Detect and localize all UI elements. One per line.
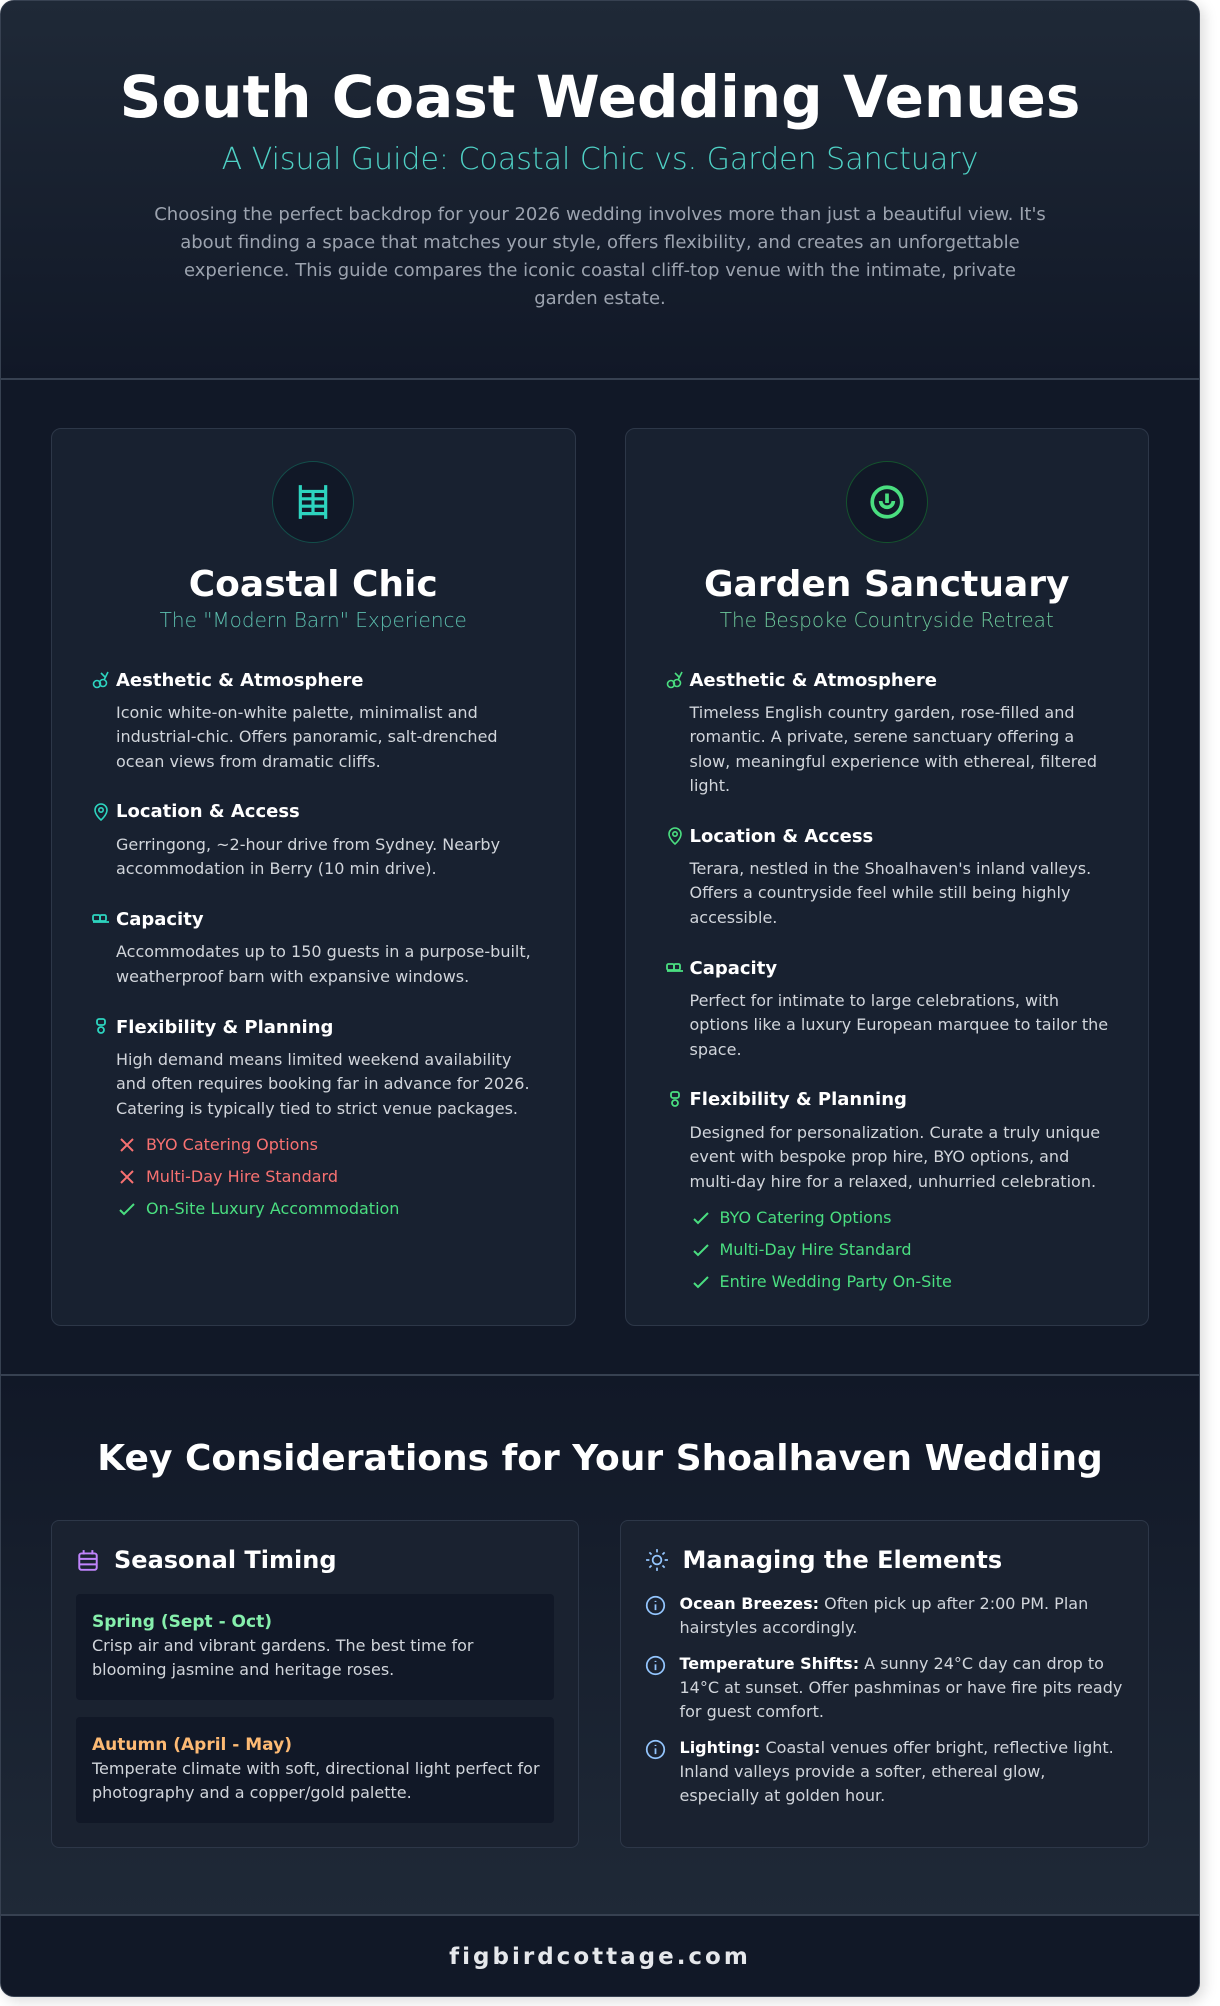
autumn box: Temperate climate with soft, directional light perfect for photography and a copper/gold palette. — [92, 1759, 540, 1802]
item: aesthetic: Aesthetic & Atmosphere — [690, 670, 937, 690]
item: temperature: Temperature Shifts: A sunny 24°C day can drop to 14°C at sunset. Offer pashminas or have fire pits ready for guest comfort. — [680, 1654, 1122, 1721]
spring box: Spring (Sept - Oct) — [92, 1612, 272, 1632]
item: location: Terara, nestled in the Shoalhaven's inland valleys. Offers a countryside feel while still being highly accessible. — [690, 859, 1091, 927]
item: capacity: Capacity — [690, 958, 777, 979]
card subtitle: The "Modern Barn" Experience — [160, 608, 467, 632]
subtitle: A Visual Guide: Coastal Chic vs. Garden Sanctuary — [222, 142, 978, 177]
item: flexibility: High demand means limited weekend availability and often requires booking far in advance for 2026. Catering is typically tied to strict venue packages. — [116, 1050, 530, 1118]
item: capacity: Capacity — [116, 909, 204, 930]
item: ocean breezes: Ocean Breezes: Often pick up after 2:00 PM. Plan hairstyles accordingly. — [680, 1594, 1088, 1637]
item: aesthetic: Aesthetic & Atmosphere — [116, 670, 364, 690]
intro text: Choosing the perfect backdrop for your 2026 wedding involves more than just a beautiful view. It's about finding a space that matches your style, offers flexibility, and creates an unforgettable experience. This guide compares the iconic coastal cliff-top venue with the intimate, private garden estate. — [154, 204, 1046, 309]
checklist — [693, 1208, 952, 1291]
venues section — [1, 380, 1199, 1376]
card title: Coastal Chic — [189, 564, 438, 605]
footer: figbirdcottage.com — [449, 1944, 751, 1970]
item: capacity — [92, 909, 531, 986]
heading: managing: Managing the Elements — [682, 1546, 1002, 1574]
item: capacity — [666, 958, 1108, 1059]
item: lighting: Lighting: Coastal venues offer bright, reflective light. Inland valleys provide a softer, ethereal glow, especially at golden hour. — [680, 1738, 1114, 1805]
checklist: BYO Catering Options — [720, 1208, 891, 1227]
spring box — [76, 1594, 554, 1700]
item: location: Location & Access — [690, 826, 873, 847]
spring box: Crisp air and vibrant gardens. The best time for blooming jasmine and heritage roses. — [92, 1636, 474, 1679]
title: South Coast Wedding Venues — [120, 63, 1080, 131]
autumn box — [76, 1717, 554, 1823]
item: aesthetic: Iconic white-on-white palette, minimalist and industrial-chic. Offers panoramic, salt-drenched ocean views from dramatic cliffs. — [116, 703, 498, 771]
checklist: Multi-Day Hire Standard — [720, 1240, 911, 1259]
checklist: Entire Wedding Party On-Site — [720, 1272, 952, 1291]
panel: coastal chic — [51, 428, 576, 1326]
card title: Garden Sanctuary — [704, 564, 1069, 605]
key considerations section — [1, 1376, 1199, 1916]
item: aesthetic — [666, 670, 1097, 795]
icon: barn — [272, 461, 354, 543]
item: location: Location & Access — [116, 801, 300, 822]
item: flexibility: Designed for personalization. Curate a truly unique event with bespoke prop hire, BYO options, and multi-day hire for a relaxed, unhurried celebration. — [690, 1123, 1100, 1191]
item: flexibility — [96, 1017, 530, 1218]
icon: garden — [846, 461, 928, 543]
item: capacity: Accommodates up to 150 guests in a purpose-built, weatherproof barn with expansive windows. — [116, 942, 531, 986]
item: flexibility: Flexibility & Planning — [116, 1017, 333, 1038]
item: location — [94, 801, 500, 878]
checklist: On-Site Luxury Accommodation — [146, 1199, 399, 1218]
header — [1, 1, 1199, 380]
section heading: Key Considerations for Your Shoalhaven Wedding — [97, 1438, 1103, 1479]
panel: garden sanctuary — [624, 428, 1149, 1326]
checklist: Multi-Day Hire Standard — [146, 1167, 338, 1186]
checklist: BYO Catering Options — [146, 1135, 318, 1154]
item: location: Gerringong, ~2-hour drive from Sydney. Nearby accommodation in Berry (10 min drive). — [116, 835, 500, 878]
autumn box: Autumn (April - May) — [92, 1735, 292, 1755]
item: location — [668, 826, 1091, 927]
panel: managing the elements — [620, 1520, 1149, 1848]
item: aesthetic: Timeless English country garden, rose-filled and romantic. A private, serene sanctuary offering a slow, meaningful experience with ethereal, filtered light. — [690, 703, 1097, 795]
item: flexibility: Flexibility & Planning — [690, 1089, 907, 1110]
checklist — [119, 1135, 399, 1218]
heading: seasonal timing: Seasonal Timing — [114, 1546, 336, 1574]
card subtitle: The Bespoke Countryside Retreat — [720, 608, 1054, 632]
panel: seasonal timing — [51, 1520, 578, 1848]
item: aesthetic — [92, 670, 498, 771]
item: flexibility — [670, 1089, 1100, 1291]
item: capacity: Perfect for intimate to large celebrations, with options like a luxury European marquee to tailor the space. — [690, 991, 1108, 1059]
